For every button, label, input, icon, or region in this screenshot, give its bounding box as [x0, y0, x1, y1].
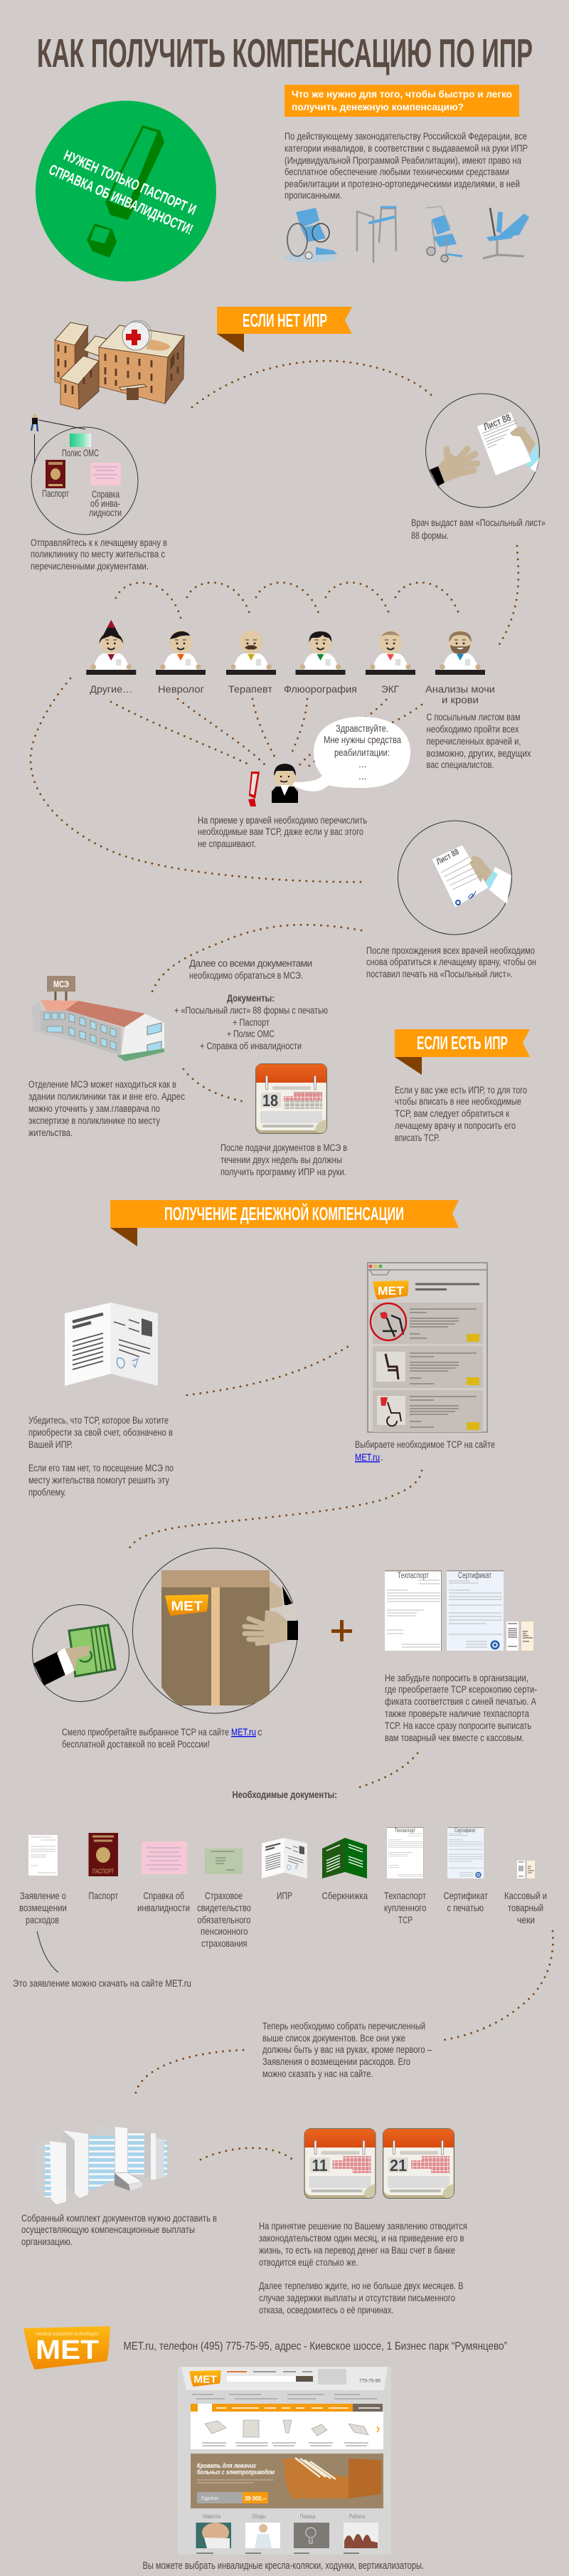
document: receipts — [504, 1861, 547, 1925]
text: then go to MSE — [174, 958, 328, 1051]
dotted arrow: big loop — [31, 678, 363, 882]
text: with the form: необходимо пройти всех — [427, 724, 519, 735]
logo on parcel: МЕТ — [171, 1599, 203, 1613]
icon: OMS policy — [70, 433, 91, 447]
icon: disability certificate — [90, 463, 121, 485]
site promo: bed: 39 000.– — [245, 2495, 266, 2502]
site news columns: Помощь — [300, 2513, 316, 2520]
text: don't forget: также проверьте наличие техпаспорта — [385, 1708, 529, 1719]
icon: MSE building — [32, 976, 164, 1061]
speech bubble: реабилитации: — [334, 747, 390, 758]
label: купленного — [384, 1902, 427, 1913]
document: certificate — [444, 1827, 488, 1913]
site news columns: Новости — [203, 2513, 220, 2520]
text: check TSR: приобрести за свой счет, обозначено в — [28, 1427, 173, 1438]
dotted arrow: to office — [135, 2050, 243, 2096]
icon: sheet with hand: Лист 88 — [482, 411, 512, 433]
text: has IPR: ТСР, вам следует обратиться к — [395, 1108, 509, 1119]
text: then go to MSE: Далее со всеми документами — [189, 958, 312, 969]
banner: has IPR — [395, 1029, 530, 1075]
document: application — [19, 1835, 67, 1925]
label: Заявление о — [20, 1890, 66, 1901]
dotted arrow: hospital to form — [192, 361, 435, 407]
text: after all doctors: После прохождения всех врачей необходимо — [366, 945, 535, 956]
intro text: (Индивидуальной Программой Реабилитации), имеют право на — [284, 155, 521, 166]
pointer line to application note — [37, 1931, 58, 1972]
text: after all doctors: снова обратиться к лечащему врачу, чтобы он — [366, 957, 536, 967]
icon: sheet with hand — [477, 411, 539, 475]
document: savings book — [321, 1838, 368, 1901]
text: check TSR: Убедитесь, что ТСР, которое Вы хотите — [28, 1415, 169, 1426]
icon: doctor's glove hand — [430, 449, 477, 486]
text: download application: Это заявление можно скачать на сайте МЕТ.ru — [13, 1978, 191, 1989]
label — [19, 1890, 67, 1925]
documents list — [174, 993, 328, 1051]
dotted arrow: to documents — [355, 1753, 418, 1789]
icon: calendar 18: 18 — [262, 1091, 278, 1110]
circle: stamped form — [398, 821, 512, 935]
text: doctor issues form — [411, 517, 546, 541]
text: with the form: возможно, других, ведущих — [427, 748, 531, 759]
icon: exclamation mark — [87, 125, 164, 258]
logo: MET: МЕТ — [36, 2335, 99, 2365]
text: decision term: На принятие решение по Вашему заявлению отводится — [259, 2221, 467, 2231]
document: passport: ПАСПОРТ — [92, 1868, 114, 1875]
label: Сберкнижка — [321, 1890, 368, 1901]
icon: technical passport — [385, 1570, 442, 1651]
text: MSE department: Отделение МСЭ может находиться как в — [28, 1079, 176, 1090]
text: collect the documents: выше список документов. Все они уже — [262, 2033, 405, 2044]
text: deliver the set: осуществляющую компенсационные выплаты — [21, 2224, 195, 2235]
text: after submitting: После подачи документов в МСЭ в — [220, 1142, 347, 1153]
text: choose TSR on site: . — [381, 1452, 383, 1463]
icon: IPR booklet — [65, 1303, 158, 1386]
label: certificate: лидности — [89, 507, 122, 518]
site logo: МЕТ — [193, 2373, 217, 2385]
text: MSE department: жительства. — [28, 1127, 73, 1138]
text: buy on site: с — [257, 1727, 262, 1738]
label: Другие… — [90, 683, 132, 695]
text: after all doctors — [366, 945, 536, 979]
label: Паспорт — [88, 1890, 118, 1901]
icon: small person with zoom lines — [31, 414, 85, 464]
icon: shower chair — [426, 206, 462, 262]
label: OMS policy: Полис ОМС — [62, 447, 99, 458]
label — [384, 1890, 427, 1925]
label: товарный — [508, 1902, 543, 1913]
label: чеки — [517, 1914, 535, 1925]
icon: calendar 11: 11 — [312, 2156, 328, 2175]
speech bubble: Здравствуйте. — [336, 723, 388, 734]
label — [425, 683, 495, 705]
intro text: прописанными. — [284, 190, 342, 201]
text: collect the documents — [262, 2021, 432, 2079]
icon: passport — [46, 460, 65, 488]
label: возмещении — [19, 1902, 67, 1913]
speech bubble: Мне нужны средства — [324, 735, 401, 745]
icon: calendar 11 — [304, 2128, 376, 2198]
contact line: МЕТ.ru, телефон (495) 775-75-95, адрес - Киевское шоссе, 1 Бизнес парк “Румянцево” — [124, 2340, 507, 2352]
orange question box: Что же нужно для того, чтобы быстро и легко — [292, 88, 512, 100]
doctor: neurologist — [156, 631, 206, 695]
text: don't forget: вам товарный чек вместе с кассовым. — [385, 1733, 524, 1743]
label: с печатью — [447, 1902, 484, 1913]
text: list the TSR: На приеме у врачей необходимо перечислить — [198, 815, 367, 826]
label: Анализы мочи — [425, 683, 495, 695]
document: IPR — [262, 1838, 307, 1901]
text: decision term: отказа, осведомитесь о её причинах. — [259, 2305, 394, 2315]
logo: MET — [23, 2326, 110, 2370]
circle: required documents — [31, 427, 138, 535]
icon: patient — [272, 764, 298, 803]
text: MSE department: здании поликлиники так и вне его. Адрес — [28, 1091, 185, 1102]
dotted arrows: doctors to patient — [111, 699, 422, 770]
site news columns: Обзоры — [252, 2513, 266, 2520]
label: passport: Паспорт — [42, 488, 69, 499]
text: has IPR — [395, 1085, 527, 1143]
text: with the form: перечисленных врачей и, — [427, 736, 521, 747]
document: disability certificate — [137, 1841, 190, 1913]
text: has IPR: вписать ТСР. — [395, 1132, 440, 1143]
dotted arrow: to calendar — [184, 1069, 245, 1102]
document: technical passport: Техпаспорт — [395, 1827, 415, 1834]
green circle callout — [36, 101, 216, 282]
label: расходов — [26, 1914, 59, 1925]
text: check TSR: Если его там нет, то посещение МСЭ по — [28, 1463, 174, 1473]
text: has IPR: чтобы вписать в нее необходимые — [395, 1096, 521, 1107]
label: certificate: Справка — [92, 488, 119, 500]
browser window with catalogue — [368, 1263, 487, 1432]
text: after submitting: течении двух недель вы должны — [220, 1155, 342, 1165]
label: Сертификат — [444, 1890, 488, 1901]
text: choose TSR on site: Выбираете необходимое ТСР на сайте — [355, 1439, 495, 1450]
text: MSE department — [28, 1079, 185, 1138]
label: пенсионного — [201, 1925, 248, 1937]
intro text: По действующему законодательству Российской Федерации, все — [284, 131, 527, 142]
text: buy on site: бесплатной доставкой по всей Росссии! — [62, 1739, 210, 1750]
text: don't forget: где преобретаете ТСР ксерокопию серти- — [385, 1684, 537, 1695]
label: ТСР — [398, 1914, 413, 1925]
speech bubble: ... — [358, 771, 366, 782]
product card 2 — [373, 1346, 483, 1388]
circle: money in hand — [33, 1604, 129, 1701]
text: collect the documents: можно сказать у нас на сайте. — [262, 2068, 373, 2079]
circle: parcel with MET logo — [132, 1548, 299, 1713]
label — [444, 1890, 488, 1913]
text: has IPR: лечащему врачу и попросить его — [395, 1120, 516, 1131]
dotted arrow: form to doctors — [497, 546, 519, 648]
website screenshot — [178, 2367, 391, 2555]
document: pension insurance — [197, 1849, 251, 1949]
site search: 775-75-95 — [359, 2379, 381, 2384]
text: with the form: вас специалистов. — [427, 759, 494, 770]
text: footer: Вы можете выбрать инвалидные кресла-коляски, ходунки, вертикализаторы. — [142, 2560, 424, 2572]
callout text: СПРАВКА ОБ ИНВАЛИДНОСТИ! — [46, 162, 196, 238]
label: ЭКГ — [381, 683, 399, 695]
site nav bar — [191, 2404, 383, 2412]
site promo: bed: больных с электроприводом — [197, 2469, 275, 2476]
text: go to the doctor — [31, 537, 167, 572]
text: check TSR: Вашей ИПР. — [28, 1439, 73, 1450]
logo: МЕТ — [378, 1285, 404, 1298]
icon: calendar 21: 21 — [390, 2156, 407, 2175]
text: after submitting: получить программу ИПР на руки. — [220, 1167, 346, 1177]
label: свидетельство — [197, 1902, 251, 1913]
label: инвалидности — [137, 1902, 190, 1913]
banner: money compensation: ПОЛУЧЕНИЕ ДЕНЕЖНОЙ КОМПЕНСАЦИИ — [164, 1203, 404, 1224]
text: after submitting — [220, 1142, 347, 1177]
label: обязательного — [198, 1914, 251, 1925]
doctor: others — [86, 620, 136, 695]
banner: money compensation — [110, 1200, 459, 1246]
orange question box: получить денежную компенсацию? — [292, 101, 464, 112]
product card 1 — [371, 1303, 483, 1344]
text: choose TSR on site — [355, 1439, 495, 1463]
text: buy on site: Смело приобретайте выбранное ТСР на сайте — [62, 1727, 229, 1738]
speech bubble — [287, 717, 410, 792]
document: passport — [88, 1833, 118, 1901]
document: certificate: Сертификат — [454, 1827, 476, 1834]
text: buy on site — [62, 1727, 262, 1750]
circle: doctor hands over form 88 — [425, 394, 539, 508]
text: MSE department: экспертизе в поликлинике по месту — [28, 1115, 160, 1126]
text: go to the doctor: Отправляйтесь к к лечащему врачу в — [31, 537, 167, 548]
icon: walker — [357, 207, 396, 262]
documents list: + «Посыльный лист» 88 формы с печатью — [174, 1005, 328, 1016]
text: decision term: случае задержки выплаты и отсутствии письменного — [259, 2293, 455, 2303]
doctor: therapist — [226, 631, 276, 695]
icon: hospital — [55, 320, 184, 409]
banner: no IPR: ЕСЛИ НЕТ ИПР — [243, 310, 327, 331]
documents list: Документы: — [227, 993, 275, 1004]
banner: has IPR: ЕСЛИ ЕСТЬ ИПР — [417, 1032, 508, 1053]
heading: required documents: Необходимые документы: — [232, 1789, 337, 1800]
callout text — [46, 147, 198, 238]
label: и крови — [442, 694, 479, 705]
orange question box — [284, 85, 519, 117]
label: Техпаспорт — [384, 1890, 426, 1901]
banner: no IPR — [217, 307, 352, 352]
label: certificate — [89, 488, 122, 518]
doctor: lab tests — [425, 631, 495, 705]
text: collect the documents: Заявления о возмещении расходов. Его — [262, 2056, 410, 2067]
speech bubble: ... — [358, 759, 366, 769]
dotted arrow: to MSE — [152, 925, 361, 992]
callout text: НУЖЕН ТОЛЬКО ПАСПОРТ И — [61, 147, 198, 219]
label: страхования — [201, 1938, 248, 1949]
site logo — [189, 2370, 221, 2387]
text: choose TSR on site: МЕТ.ru — [355, 1452, 380, 1463]
text: with the form: С посыльным листом вам — [427, 712, 521, 722]
text: deliver the set: Собранный комплект документов нужно доставить в — [21, 2213, 217, 2224]
icon: technical passport: Техпаспорт — [398, 1572, 430, 1580]
intro text: реабилитации и протезно-ортопедическими изделиями, в ней — [284, 179, 520, 189]
product card 3 — [373, 1390, 483, 1432]
dotted arrow: office to calendars — [201, 2148, 294, 2160]
dotted arcs between doctors — [116, 582, 460, 618]
text: don't forget: фиката соответствия с синей печатью. А — [385, 1696, 536, 1707]
text: decision term: жизнь, то есть на перевод денег на Ваш счет в банке — [259, 2245, 455, 2256]
icon: calendar 21 — [383, 2128, 454, 2198]
label: Невролог — [158, 683, 204, 695]
logo: MET: medical equipment technologies — [36, 2332, 99, 2337]
text: decision term: отводится ещё столько же. — [259, 2257, 358, 2268]
icon: MSE building: МСЭ — [53, 979, 69, 989]
label: Справка об — [144, 1890, 184, 1901]
label: Кассовый и — [504, 1890, 547, 1901]
text: don't forget: ТСР. На кассе сразу попросите выписать — [385, 1720, 531, 1731]
documents list: + Паспорт — [233, 1017, 270, 1028]
icon: red exclamation — [248, 772, 260, 806]
site news columns: Работа — [349, 2513, 365, 2520]
text: list the TSR: не спрашивают. — [198, 838, 256, 849]
text: list the TSR: необходимые вам ТСР, даже если у вас этого — [198, 826, 363, 837]
text: deliver the set: организацию. — [21, 2236, 73, 2247]
text: doctor issues form: 88 формы. — [411, 530, 449, 541]
icon: certificate: Сертификат — [458, 1572, 492, 1580]
label — [197, 1890, 251, 1949]
text: collect the documents: должны быть у вас на руках, кроме первого – — [262, 2044, 432, 2055]
icon: patient lift — [483, 208, 529, 258]
icon: plus — [331, 1620, 352, 1641]
site promo: bed — [191, 2454, 383, 2508]
icon: certificate — [447, 1570, 504, 1651]
documents list: + Справка об инвалидности — [200, 1041, 302, 1051]
logo — [373, 1281, 409, 1300]
label: Флюорография — [284, 683, 357, 695]
site search — [192, 2369, 381, 2399]
site product carousel — [191, 2412, 383, 2449]
icon: calendar 18 — [256, 1063, 327, 1133]
documents list: + Полис ОМС — [227, 1029, 275, 1039]
label: ИПР — [277, 1890, 292, 1901]
label: certificate: об инва- — [90, 498, 120, 509]
text: buy on site: МЕТ.ru — [231, 1727, 256, 1738]
site promo: bed: Кровать для лежачих — [197, 2462, 257, 2469]
text: after all doctors: поставил печать на «Посыльный лист». — [366, 969, 513, 979]
text: don't forget: Не забудьте попросить в организации, — [385, 1673, 528, 1683]
text: decision term — [259, 2221, 467, 2315]
site news columns — [196, 2513, 378, 2553]
circle: stamped form: Лист 88 — [435, 846, 461, 867]
label: Терапевт — [228, 683, 273, 695]
text: list the TSR — [198, 815, 367, 849]
dotted arrow: site to purchase — [129, 1471, 422, 1548]
text: go to the doctor: перечисленными документами. — [31, 561, 149, 572]
text: with the form — [427, 712, 531, 770]
logo on parcel — [165, 1594, 208, 1616]
text: don't forget — [385, 1673, 537, 1743]
site promo: bed: Подробнее — [201, 2496, 218, 2501]
dotted arrow: booklet to site — [187, 1345, 350, 1395]
label: Страховое — [205, 1890, 243, 1901]
icon: receipts — [506, 1621, 533, 1651]
label — [504, 1890, 547, 1925]
dotted arrow: to collect documents — [443, 1931, 553, 2040]
intro text: бесплатное обеспечение любыми техническими средствами — [284, 167, 509, 177]
text: check TSR: проблему. — [28, 1487, 66, 1498]
text: decision term: законодательством один месяц, и на приведение его в — [259, 2233, 464, 2244]
text: check TSR — [28, 1415, 174, 1498]
text: decision term: Далее терпеливо ждите, но не больше двух месяцев. В — [259, 2281, 464, 2291]
text: then go to MSE: необходимо обрататься в МСЭ. — [189, 970, 303, 981]
icon: office building — [36, 2125, 167, 2204]
text: go to the doctor: поликлинику по месту жительства с — [31, 549, 165, 559]
text: collect the documents: Теперь необходимо собрать перечисленный — [262, 2021, 425, 2031]
text: has IPR: Если у вас уже есть ИПР, то для того — [395, 1085, 527, 1095]
doctor: ECG — [366, 631, 415, 695]
intro text: категории инвалидов, в соответствии с выдаваемой на руки ИПР — [284, 143, 528, 154]
text: check TSR: месту жительства помогут решить эту — [28, 1475, 169, 1486]
text: deliver the set — [21, 2213, 217, 2247]
icon: wheelchair — [284, 208, 337, 262]
doctor: fluorography — [284, 631, 357, 695]
intro text — [284, 131, 528, 201]
icon: hands holding parcel — [245, 1580, 299, 1646]
text: MSE department: можно уточнить у зам.главврача по — [28, 1103, 160, 1114]
document: technical passport — [384, 1827, 427, 1925]
label — [137, 1890, 190, 1913]
